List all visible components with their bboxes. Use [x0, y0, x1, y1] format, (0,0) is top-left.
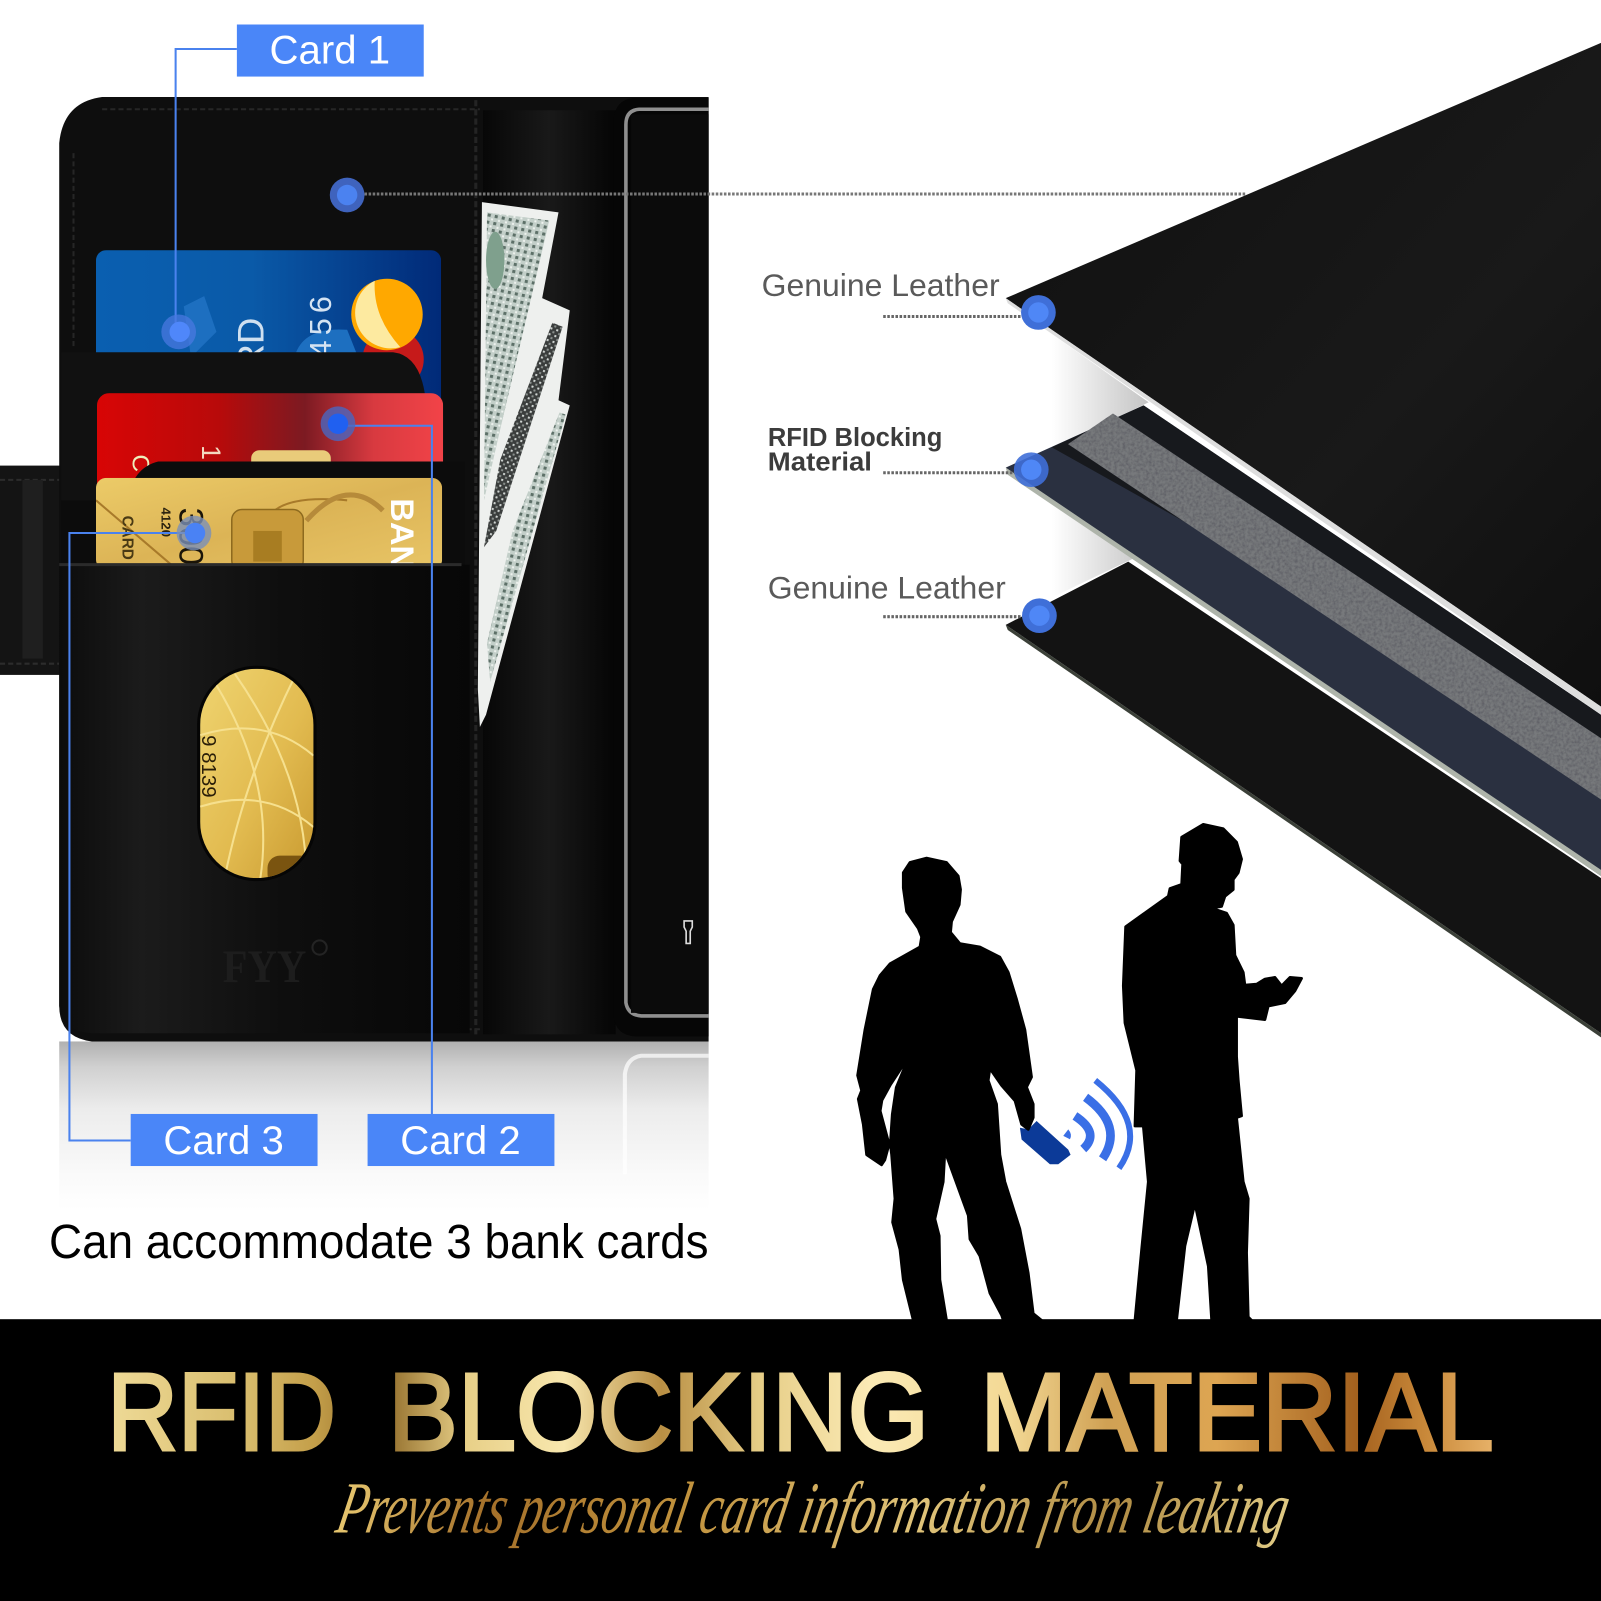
phone reflection	[625, 1056, 709, 1174]
card number: 1	[196, 445, 226, 460]
stitching	[74, 109, 613, 1029]
label: Genuine Leather upper: Genuine Leather	[762, 267, 1000, 303]
gold bank card: CARD	[119, 516, 136, 560]
cash pocket	[483, 110, 616, 1034]
panel: wallet photo	[0, 97, 709, 1210]
label: Card 1	[161, 25, 424, 349]
caption: card capacity: Can accommodate 3 bank cards	[49, 1216, 709, 1269]
red bank card	[97, 393, 444, 484]
label: Card 3	[69, 516, 318, 1166]
icon: bank card	[1020, 1121, 1071, 1164]
card pocket 2	[61, 462, 465, 582]
wallet inner cover	[59, 97, 709, 1041]
marker	[1021, 295, 1056, 330]
banner title: BLOCKING	[388, 1351, 929, 1474]
label: Genuine Leather upper	[762, 267, 1056, 330]
card pocket 3	[59, 565, 470, 1033]
label: RFID Blocking Material: RFID Blocking	[768, 424, 942, 452]
label: Card 3: Card 3	[163, 1119, 284, 1163]
phone in case	[614, 98, 709, 1036]
silhouette: person with card	[858, 858, 1042, 1320]
blue bank card	[96, 250, 441, 398]
label: RFID Blocking Material	[768, 424, 1049, 487]
card pocket 1	[61, 352, 425, 582]
shadows between layers	[1041, 327, 1149, 454]
bottom leather layer	[1006, 562, 1601, 1037]
wallet clasp strap	[0, 466, 63, 675]
marker: leather pointer	[330, 178, 365, 212]
flashlight icon	[684, 921, 692, 943]
marker	[177, 516, 211, 550]
chip	[232, 510, 303, 571]
marker	[161, 314, 196, 349]
label: RFID Blocking Material: Material	[768, 449, 872, 477]
top leather layer	[1006, 43, 1601, 715]
gold bank card: 300	[172, 507, 210, 565]
marker	[321, 406, 355, 441]
card brand: BAN	[384, 498, 421, 569]
card text: RD	[230, 318, 271, 371]
RFID blocking layer	[1006, 405, 1601, 876]
silhouette: person with phone	[1123, 824, 1302, 1320]
gold bank card	[96, 478, 442, 571]
label: Card 1: Card 1	[270, 28, 390, 72]
card number: 456	[304, 291, 338, 357]
label: Genuine Leather lower: Genuine Leather	[768, 569, 1006, 605]
wallet reflection	[59, 1041, 709, 1210]
banknotes	[478, 202, 570, 727]
label: Card 2	[321, 406, 554, 1166]
panel: material layers	[1006, 43, 1601, 1037]
marker	[1022, 598, 1057, 633]
embossed logo: FYY	[223, 941, 306, 993]
icon: RFID signal waves	[1063, 1080, 1130, 1168]
card digits: 4120	[158, 507, 173, 537]
banner title: RFID	[107, 1351, 336, 1474]
illustration: RFID skimming scene	[858, 824, 1302, 1320]
label: Genuine Leather lower	[768, 569, 1057, 633]
card text: C	[127, 454, 154, 472]
banner title: MATERIAL	[980, 1351, 1494, 1474]
banner title	[107, 1351, 1494, 1474]
marker	[1014, 452, 1049, 487]
window showing gold card	[197, 666, 317, 886]
bottom banner	[0, 1319, 1601, 1601]
fold seam	[474, 100, 477, 1037]
label: Card 2: Card 2	[400, 1119, 521, 1163]
window showing gold card: 9 8139	[197, 735, 219, 798]
dotted connector to layers	[365, 192, 1246, 195]
leader line	[176, 49, 237, 332]
